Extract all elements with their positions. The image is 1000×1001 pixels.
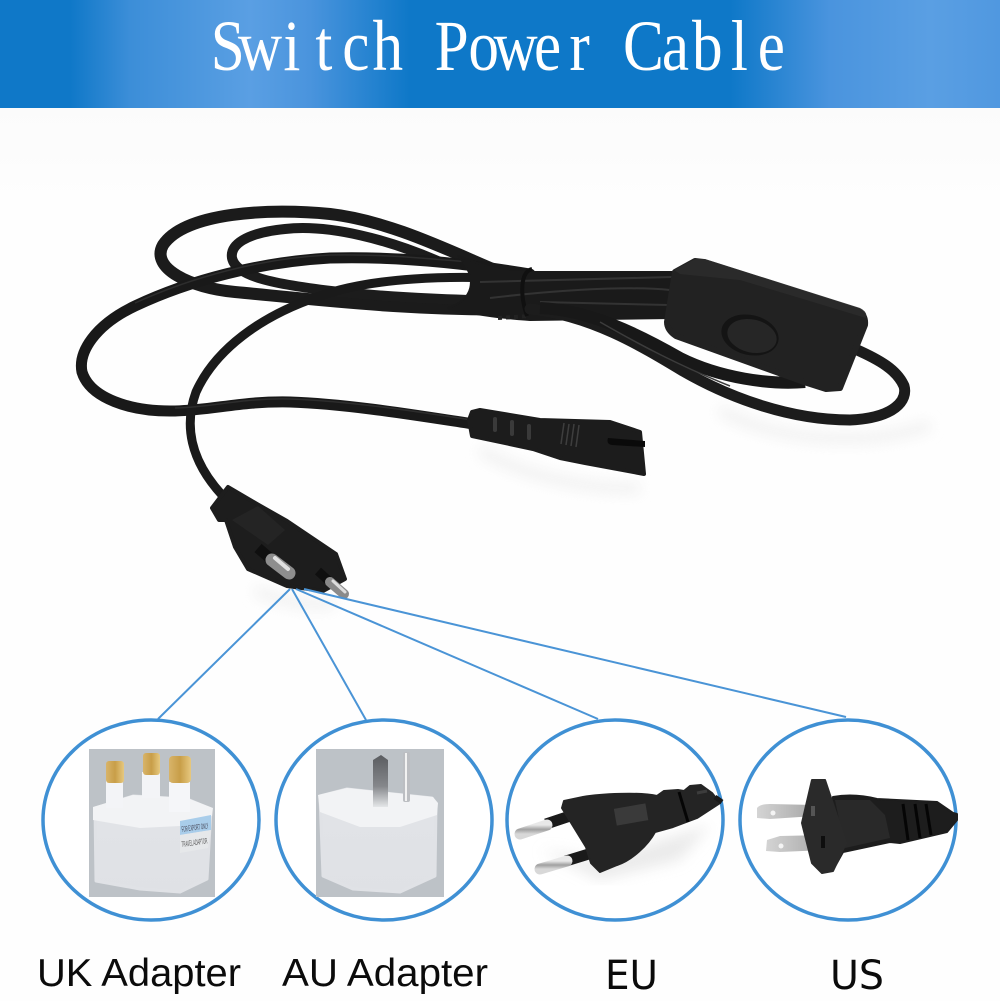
panel: UK adapter: TRAVEL ADAPTOR — [181, 836, 208, 849]
cable shadows — [255, 410, 930, 604]
cable: long outer loop — [161, 212, 530, 309]
label: AU Adapter: AU Adapter — [282, 952, 488, 995]
EU plug body — [562, 785, 720, 872]
pin sleeves — [258, 548, 272, 560]
cable: connector run — [81, 258, 530, 425]
UK adapter photo — [89, 749, 215, 897]
cable: inner loop — [232, 228, 530, 302]
US plug illustration — [757, 780, 957, 873]
cable highlights — [135, 255, 478, 421]
connector lines — [158, 589, 846, 720]
panel: AU adapter — [276, 720, 492, 920]
cable: lower run to right loop — [530, 309, 905, 420]
soft grey backdrop — [0, 108, 1000, 208]
C7 connector — [469, 410, 645, 474]
US grip ribs — [903, 804, 931, 840]
EU strain relief slots — [679, 792, 688, 822]
socket notch — [608, 438, 645, 447]
connector grip ribs — [493, 417, 531, 440]
title: Switch Power Cable — [211, 6, 785, 86]
inline switch — [667, 259, 866, 389]
adapter sticker — [180, 815, 211, 853]
Euro plug — [212, 487, 345, 594]
adapter body — [95, 796, 211, 892]
label: EU: EU — [605, 953, 658, 999]
AU adapter photo — [316, 749, 444, 897]
connector texture — [561, 423, 579, 447]
US plug body — [830, 796, 957, 870]
panel: UK adapter — [43, 720, 259, 920]
cable tie — [522, 269, 532, 316]
label: UK Adapter: UK Adapter — [37, 952, 241, 995]
EU plug illustration — [520, 785, 722, 880]
US blades — [757, 804, 815, 819]
label: US: US — [830, 953, 884, 999]
product photo: switch power cable — [81, 212, 930, 604]
UK pins — [142, 772, 160, 798]
cable bundle — [448, 256, 672, 320]
switch rocker — [717, 309, 783, 361]
panel: UK adapter: FOR EXPORT ONLY — [181, 821, 209, 834]
AU pins — [373, 755, 388, 807]
header banner — [0, 0, 1000, 108]
EU pins — [546, 816, 570, 824]
US faceplate — [802, 780, 846, 873]
panel: EU plug — [507, 720, 723, 920]
cable: plug run — [190, 277, 530, 495]
panel: US plug — [740, 720, 957, 920]
plug pins — [272, 560, 289, 573]
bundled strain relief ribs — [498, 316, 530, 318]
